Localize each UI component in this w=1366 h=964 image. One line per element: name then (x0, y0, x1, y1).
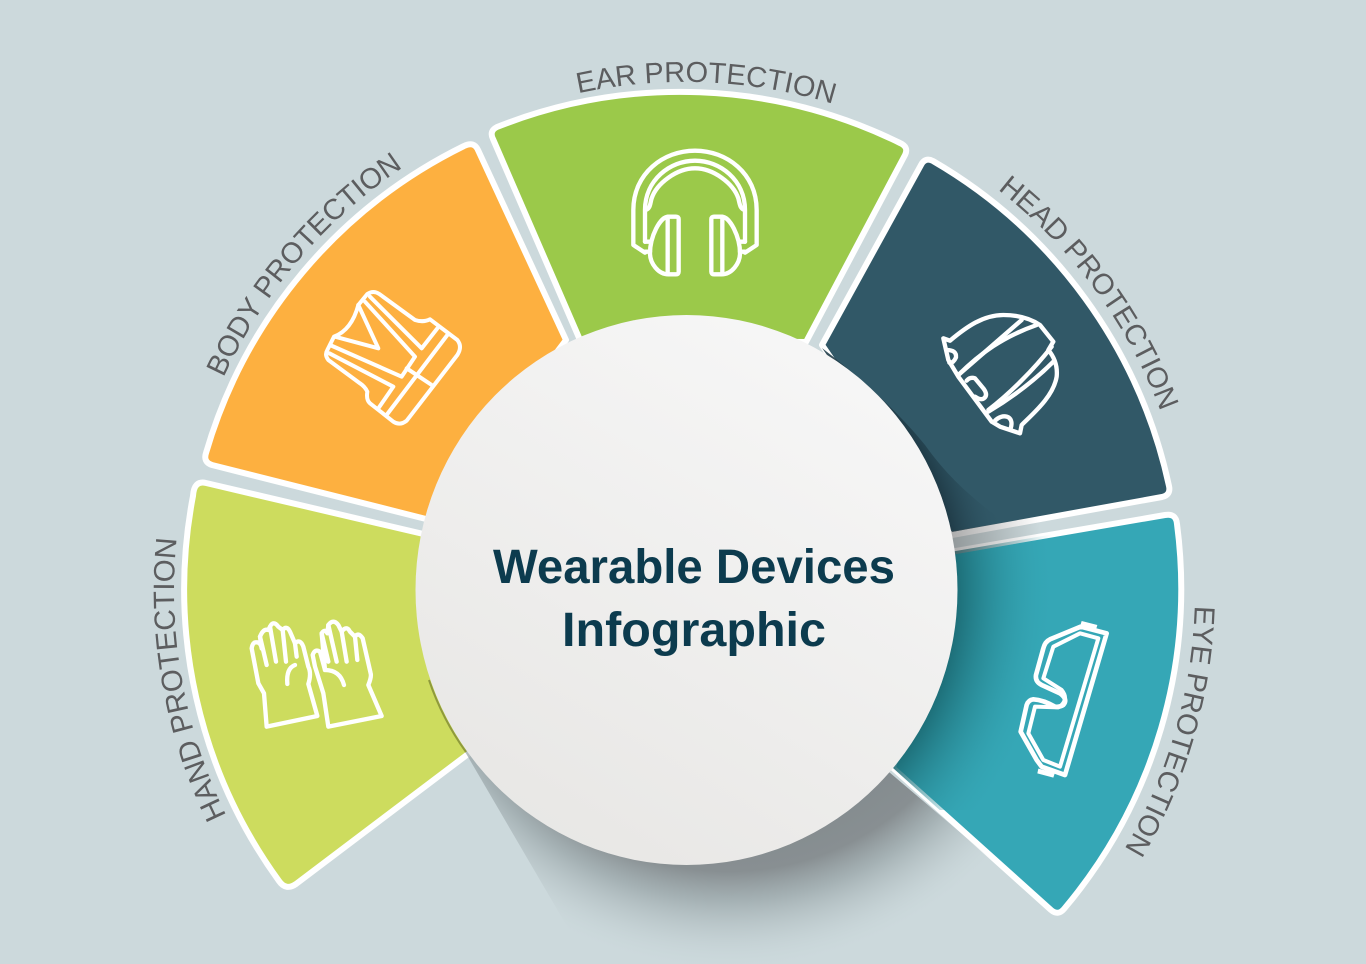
label: ear protection: EAR PROTECTION (576, 62, 836, 104)
label: hand protection: HAND PROTECTION (154, 539, 226, 822)
icon: safety vest (326, 292, 460, 424)
label: eye protection: EYE PROTECTION (1126, 608, 1215, 857)
panel: body protection segment (205, 144, 566, 520)
icon: hard hat (943, 315, 1057, 433)
icon: ear muffs (633, 151, 757, 274)
panel: hand protection segment (184, 483, 480, 887)
hand segment edge shadow (429, 680, 466, 752)
icon: gloves (252, 622, 382, 727)
title: Wearable Devices (493, 541, 895, 594)
eye segment shadow (893, 536, 1048, 810)
circle drop shadow (465, 749, 982, 942)
center circle (416, 315, 958, 865)
head segment shadow (822, 348, 976, 532)
panel: ear protection segment (492, 92, 906, 342)
label: body protection: BODY PROTECTION (206, 152, 401, 376)
title (493, 541, 895, 657)
panel: head protection segment (822, 160, 1169, 535)
label: head protection: HEAD PROTECTION (1000, 175, 1178, 410)
panel: eye protection segment (893, 515, 1181, 913)
icon: safety goggles (1021, 621, 1107, 778)
shadow band between head and eye (948, 515, 1045, 556)
title: Infographic (562, 604, 826, 657)
